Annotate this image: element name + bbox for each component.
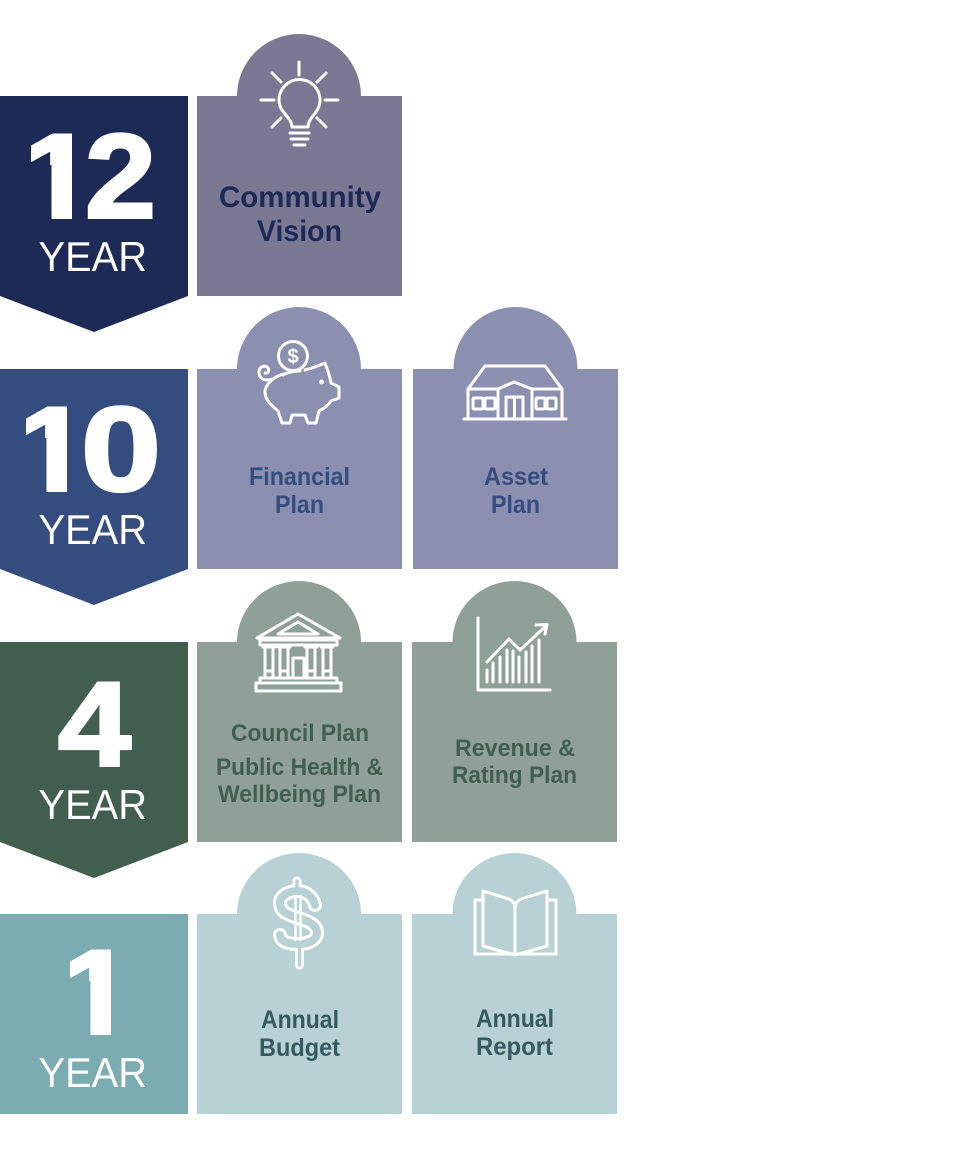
icon: growth chart: [478, 618, 550, 690]
badge: 1 year: 1: [59, 926, 135, 1060]
label: Annual Budget: Budget: [259, 1034, 341, 1062]
badge: 10 year: 1: [15, 382, 91, 516]
panel: Financial Plan: [197, 307, 402, 569]
label: Annual Budget: [259, 1006, 341, 1062]
panel: Council Plan and Public Health & Wellbeing Plan: [197, 581, 402, 842]
label: Annual Report: Annual: [476, 1005, 554, 1033]
badge: 10 year: [0, 369, 188, 605]
label: Council Plan and Public Health & Wellbeing Plan: Wellbeing Plan: [218, 781, 381, 808]
icon: house: [464, 366, 566, 419]
label: Asset Plan: [484, 463, 549, 519]
badge: 12 year: YEAR: [38, 233, 147, 280]
label: Council Plan and Public Health & Wellbeing Plan: [216, 720, 383, 808]
label: Financial Plan: Financial: [249, 463, 350, 491]
label: Financial Plan: [249, 463, 350, 519]
label: Revenue & Rating Plan: Revenue &: [455, 735, 575, 762]
badge: 12 year: 1: [20, 110, 96, 244]
label: Annual Report: Report: [476, 1033, 554, 1061]
label: Annual Budget: Annual: [261, 1006, 339, 1034]
badge: 1 year: YEAR: [38, 1049, 147, 1096]
icon: light bulb: [261, 62, 338, 145]
badge: 12 year: [0, 96, 188, 332]
panel: Annual Report: [412, 853, 617, 1114]
label: Financial Plan: Plan: [275, 491, 324, 519]
icon: piggy bank: [259, 342, 339, 423]
badge: 12 year: 2: [85, 110, 156, 244]
badge: 4 year: [0, 642, 188, 878]
badge: 10 year: YEAR: [38, 506, 147, 553]
row: 4 year: [0, 581, 617, 878]
row: 10 year: [0, 307, 618, 605]
badge: 10 year: 0: [81, 382, 161, 516]
row: 1 year: [0, 853, 617, 1114]
label: Asset Plan: Plan: [491, 491, 540, 519]
label: Council Plan and Public Health & Wellbeing Plan: Council Plan: [231, 720, 369, 747]
label: Community Vision: Community: [219, 181, 381, 214]
icon: dollar sign: [280, 881, 317, 965]
icon: open book: [475, 891, 556, 955]
icon: civic building: [256, 614, 341, 691]
label: Revenue & Rating Plan: [452, 735, 577, 789]
label: Community Vision: [219, 181, 381, 248]
icon: piggy bank: $: [287, 346, 299, 368]
panel: Asset Plan: [413, 307, 618, 569]
label: Revenue & Rating Plan: Rating Plan: [452, 762, 577, 789]
label: Council Plan and Public Health & Wellbeing Plan: Public Health &: [216, 754, 383, 781]
badge: 4 year: 4: [58, 658, 131, 792]
panel: Community Vision: [197, 34, 402, 296]
label: Community Vision: Vision: [257, 215, 342, 248]
row: 12 year: [0, 34, 402, 332]
badge: 1 year: [0, 914, 188, 1114]
panel: Revenue & Rating Plan: [412, 581, 617, 842]
panel: Annual Budget: [197, 853, 402, 1114]
label: Annual Report: [476, 1005, 554, 1061]
label: Asset Plan: Asset: [484, 463, 549, 491]
badge: 4 year: YEAR: [38, 781, 147, 828]
